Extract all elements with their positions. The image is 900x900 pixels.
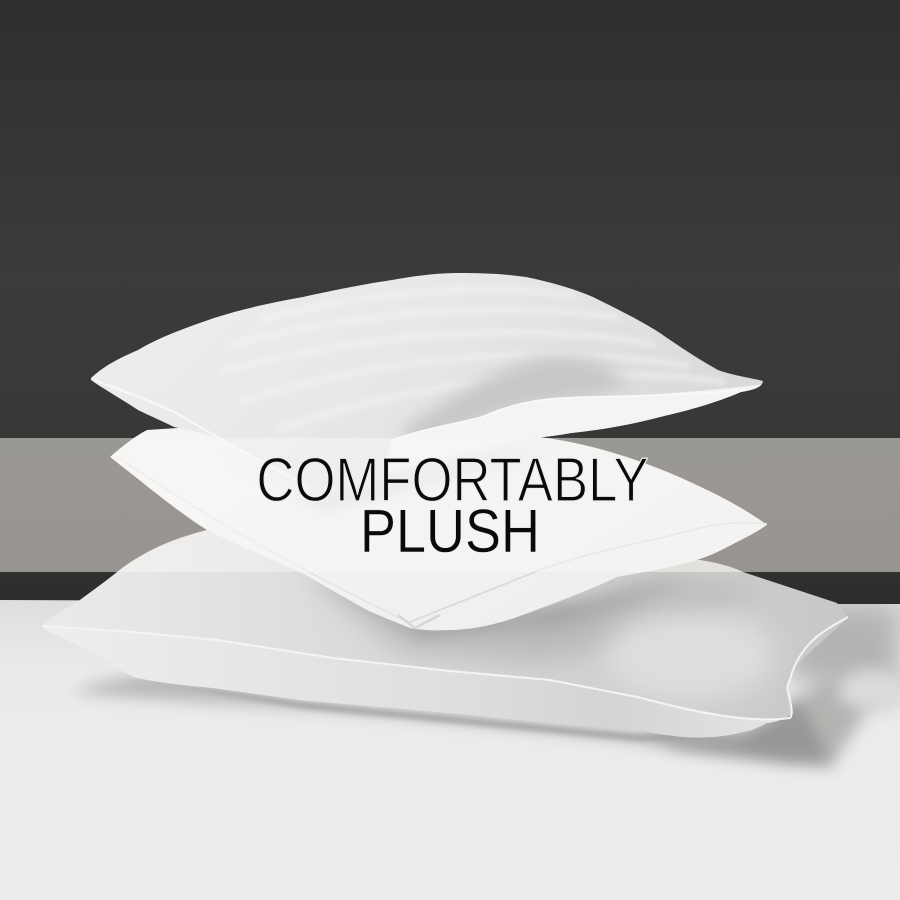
piping seams: [390, 390, 745, 441]
shadow cast by middle pillow: [342, 576, 739, 667]
middle pillow: [110, 420, 767, 630]
background wall: [0, 0, 900, 604]
woven stripes: [612, 338, 722, 384]
floor shadows: [70, 604, 900, 768]
translucent banner: [0, 438, 900, 572]
heading: PLUSH: PLUSH: [360, 498, 540, 566]
lower flange: [136, 662, 779, 738]
bottom pillow: [42, 530, 848, 745]
corner ruffle: [398, 615, 440, 628]
shadow under middle pillow: [300, 575, 700, 640]
plump highlight: [605, 610, 775, 700]
white floor: [0, 600, 900, 900]
soft shadow on right face: [402, 352, 625, 436]
top pillow: [91, 273, 763, 438]
piping seam: [42, 617, 848, 719]
heading: COMFORTABLY: COMFORTABLY: [256, 446, 649, 515]
lower face: [380, 384, 765, 480]
shadow under top pillow: [220, 438, 575, 510]
